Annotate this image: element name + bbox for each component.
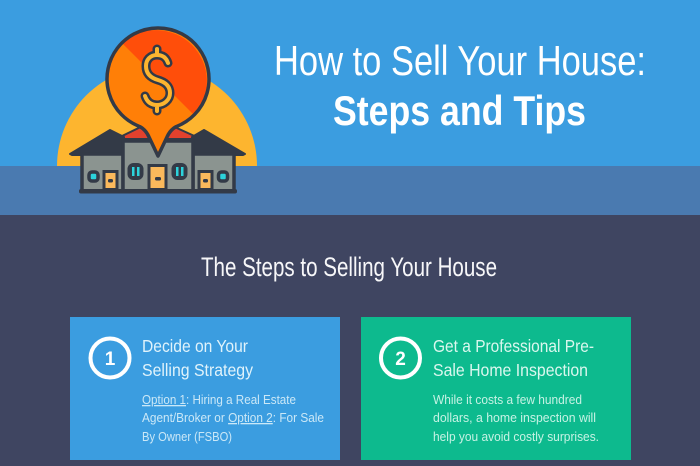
step number badge 1: 1 (105, 349, 116, 370)
step 2 body text: While it costs a few hundred (433, 392, 582, 407)
step 2 body text: help you avoid costly surprises. (433, 429, 599, 444)
card background (70, 317, 340, 460)
step 1 heading (142, 336, 253, 380)
pin body (107, 28, 209, 156)
centre right window (173, 164, 186, 178)
ground line (79, 189, 237, 194)
left window (89, 172, 98, 181)
step number badge 1 (90, 338, 130, 378)
step 1 body text (142, 392, 324, 444)
title line 2: Steps and Tips (333, 87, 586, 134)
right roof (192, 130, 245, 155)
step 2 heading: Sale Home Inspection (433, 360, 588, 380)
step number badge 2 (381, 338, 420, 378)
header ground band (0, 166, 700, 215)
card background (361, 317, 631, 460)
pin outline (107, 28, 209, 156)
title (274, 37, 646, 134)
panel: step 1 (70, 317, 340, 460)
section heading: The Steps to Selling Your House (201, 252, 497, 282)
dollar sign (145, 49, 170, 111)
main dark panel background (0, 215, 700, 466)
step 1 heading: Selling Strategy (142, 360, 253, 380)
step 1 body text: Agent/Broker or Option 2: For Sale (142, 410, 324, 425)
icon: row of houses (70, 119, 245, 194)
right window (218, 172, 228, 181)
centre left window (129, 164, 142, 178)
right house wall (193, 154, 234, 191)
step 1 body text: Option 1: Hiring a Real Estate (142, 392, 296, 407)
panel: step 2 (361, 317, 631, 460)
icon: sun (57, 66, 257, 166)
icon: map pin with dollar sign (107, 28, 209, 156)
step 1 heading: Decide on Your (142, 336, 248, 356)
step 2 heading: Get a Professional Pre- (433, 336, 594, 356)
step 2 body text (433, 392, 599, 444)
left roof (70, 130, 124, 155)
step 2 body text: dollars, a home inspection will (433, 410, 596, 425)
left house wall (82, 154, 123, 191)
door handles (108, 177, 208, 182)
pin darker diagonal (122, 30, 207, 115)
step number badge 2: 2 (395, 349, 406, 370)
header background (0, 0, 700, 166)
right door (199, 172, 212, 190)
step 2 heading (433, 336, 594, 380)
centre door (149, 166, 166, 190)
centre red roof (116, 119, 201, 139)
icon: houses with dollar pin and sun (57, 28, 257, 194)
left door (104, 172, 117, 190)
centre house wall (123, 141, 193, 191)
step 1 body text: By Owner (FSBO) (142, 429, 232, 444)
